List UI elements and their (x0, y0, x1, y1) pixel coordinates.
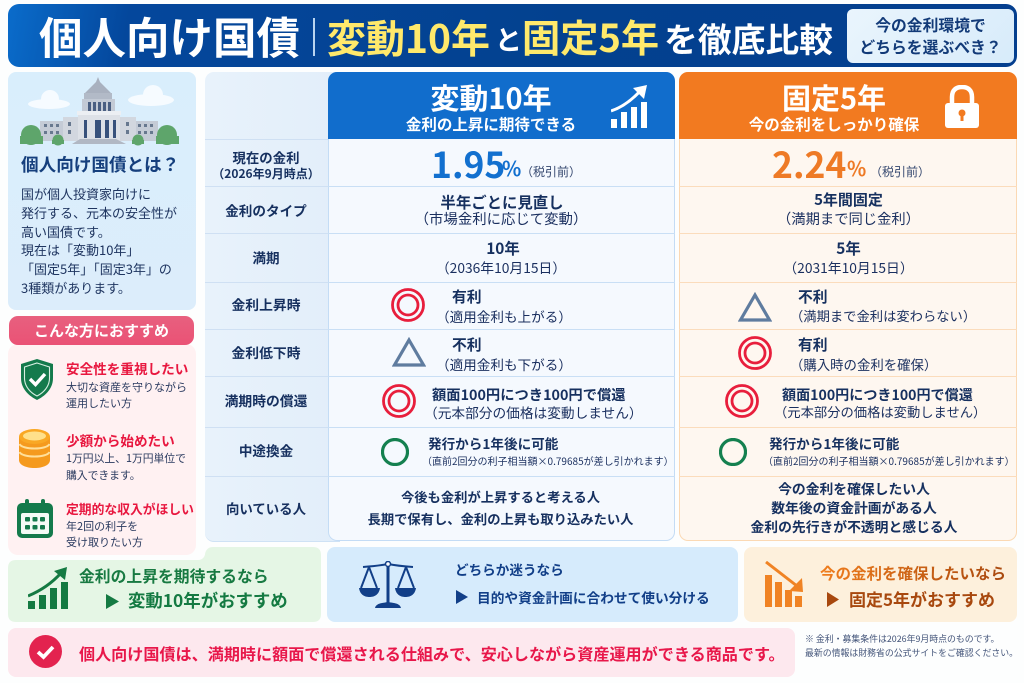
suited people (368, 487, 634, 528)
orange lead text: 今の金利を確保したいなら (820, 562, 1006, 584)
title (39, 4, 833, 67)
maturity bold: 5年 (836, 237, 861, 259)
blue lead text: どちらか迷うなら (455, 559, 564, 579)
column title: 変動10年 (430, 76, 552, 118)
icon: double circle (738, 336, 772, 370)
footnote: ※ 金利・募集条件は2026年9月時点のものです。 (805, 632, 999, 645)
about body text: 現在は「変動10年」 (21, 240, 139, 259)
icon: double circle (391, 288, 425, 322)
type bold: 半年ごとに見直し (440, 191, 564, 213)
column header (679, 72, 1017, 139)
rise text bold: 有利 (452, 286, 482, 307)
cashing bold: 発行から1年後に可能 (428, 433, 558, 453)
label: 金利低下時: 金利低下時 (232, 342, 300, 362)
rate value (431, 138, 581, 189)
green arrow (106, 594, 119, 609)
about body text: 「固定5年」「固定3年」の (21, 259, 172, 278)
label: 向いている人: 向いている人 (226, 498, 306, 518)
type note: （市場金利に応じて変動） (415, 208, 587, 229)
label: 満期時の償還: 満期時の償還 (225, 390, 307, 410)
item text: 1万円以上、1万円単位で (66, 450, 186, 466)
footnote: 最新の情報は財務省の公式サイトをご確認ください。 (805, 646, 1018, 659)
tax note: （税引前） (870, 163, 930, 180)
title: 変動10年: 変動10年 (327, 9, 490, 65)
item: safety (21, 358, 188, 411)
type bold: 5年間固定 (814, 189, 883, 210)
label: 金利上昇時: 金利上昇時 (232, 294, 300, 314)
cashing bold: 発行から1年後に可能 (769, 433, 899, 453)
icon: check circle (29, 635, 62, 668)
item text (66, 379, 187, 411)
about body text (21, 184, 177, 297)
item text: 運用したい方 (66, 395, 132, 411)
about body text: 国が個人投資家向けに (21, 184, 151, 203)
orange conclusion: 固定5年がおすすめ (849, 586, 995, 611)
icon: rising chart (611, 85, 647, 128)
row dividers (329, 186, 674, 477)
item text: 受け取りたい方 (66, 534, 143, 550)
redemption note: （元本部分の価格は変動しません） (424, 402, 643, 422)
fall text bold: 有利 (798, 334, 828, 355)
maturity bold: 10年 (486, 237, 520, 259)
icon: triangle (738, 292, 772, 322)
icon: falling chart (765, 561, 803, 607)
rise text bold: 不利 (798, 286, 828, 307)
title: を徹底比較: を徹底比較 (664, 13, 833, 62)
about body text: 高い国債です。 (21, 222, 111, 241)
panel: green recommendation (8, 547, 321, 622)
green text line: 金利の上昇を期待するなら (79, 564, 269, 587)
column title: 固定5年 (782, 76, 886, 118)
about body text: 発行する、元本の安全性が (21, 203, 177, 222)
column subtitle: 今の金利をしっかり確保 (749, 113, 919, 135)
title: 個人向け国債: 個人向け国債 (39, 4, 300, 67)
label: 満期: 満期 (252, 247, 280, 267)
icon: circle (719, 438, 747, 466)
fall note: （購入時の金利を確保） (790, 354, 937, 374)
row dividers (680, 186, 1016, 477)
column: 固定5年 (679, 72, 1017, 541)
orange arrow (827, 592, 839, 607)
redemption note: （元本部分の価格は変動しません） (774, 402, 986, 421)
redemption bold: 額面100円につき100円で償還 (432, 384, 626, 405)
item text: 購入できます。 (66, 466, 140, 482)
item text (66, 450, 186, 482)
column header (328, 72, 675, 139)
tax note: （税引前） (521, 163, 581, 180)
column: 変動10年 (328, 72, 675, 541)
rate number: 2.24 (772, 138, 846, 189)
rate number: 1.95 (431, 138, 505, 189)
rise note: （適用金利も上がる） (436, 306, 572, 326)
summary text: 個人向け国債は、満期時に額面で償還される仕組みで、安心しながら資産運用ができる商品です。 (79, 641, 785, 665)
panel: summary (8, 628, 795, 677)
icon: calendar (17, 499, 53, 538)
panel: orange recommendation (744, 547, 1017, 622)
icon: triangle (392, 337, 426, 367)
title: と: と (495, 19, 522, 58)
callout text: 今の金利環境で (875, 13, 986, 36)
comparison table (205, 72, 1017, 542)
label: 中途換金: 中途換金 (239, 440, 293, 460)
title divider (313, 18, 315, 56)
item text: 大切な資産を守りながら (66, 379, 187, 395)
rate percent: % (502, 153, 521, 182)
redemption bold: 額面100円につき100円で償還 (782, 385, 973, 405)
label: 金利のタイプ: 金利のタイプ (225, 200, 307, 220)
blue arrow (456, 590, 468, 604)
fall note: （適用金利も下がる） (436, 354, 572, 374)
item: small amount (19, 429, 186, 482)
callout: 今の金利環境で (847, 9, 1014, 63)
label: 2026年9月時点: （2026年9月時点） (212, 165, 320, 182)
callout text: どちらを選ぶべき？ (859, 35, 1002, 58)
row dividers (205, 139, 328, 477)
suited people: 長期で保有し、金利の上昇も取り込みたい人 (368, 508, 633, 528)
maturity date: （2036年10月15日） (436, 257, 566, 277)
icon: circle (381, 438, 409, 466)
suited people: 今の金利を確保したい人 (778, 478, 930, 498)
fall text bold: 不利 (452, 334, 482, 355)
recommendation heading: こんな方におすすめ (34, 320, 169, 341)
callout text (859, 13, 1002, 58)
recommendation body background (8, 344, 196, 555)
heading: 個人向け国債とは？: 個人向け国債とは？ (21, 152, 179, 177)
column subtitle: 金利の上昇に期待できる (406, 113, 576, 135)
label: 現在の金利: 現在の金利 (233, 147, 299, 167)
rate percent: % (847, 153, 866, 182)
suited people: 数年後の資金計画がある人 (771, 497, 937, 517)
illustration: national diet building (20, 77, 179, 146)
panel: blue recommendation (327, 547, 738, 622)
item: regular income (17, 499, 194, 550)
icon: double circle (382, 384, 416, 418)
panel: about (8, 72, 196, 310)
icon: coins (19, 429, 50, 468)
about body text: 3種類があります。 (21, 278, 131, 297)
icon: lock (945, 85, 979, 128)
green background (8, 547, 321, 622)
footnote (805, 632, 1020, 662)
green conclusion: 変動10年がおすすめ (128, 588, 288, 613)
item text (66, 518, 143, 550)
icon: double circle (725, 384, 759, 418)
blue conclusion: 目的や資金計画に合わせて使い分ける (477, 587, 710, 607)
type note: （満期まで同じ金利） (777, 208, 920, 229)
panel: recommended for (8, 316, 196, 555)
suited people (750, 478, 958, 536)
item heading: 定期的な収入がほしい (66, 499, 194, 518)
header banner (8, 4, 1017, 67)
cashing note: （直前2回分の利子相当額×0.79685が差し引かれます） (763, 453, 1015, 468)
recommendation heading (9, 316, 194, 345)
item heading: 少額から始めたい (66, 430, 175, 450)
icon: shield (21, 359, 53, 400)
maturity date: （2031年10月15日） (783, 257, 914, 277)
cashing note: （直前2回分の利子相当額×0.79685が差し引かれます） (422, 453, 674, 468)
rate value (772, 138, 930, 189)
suited people: 今後も金利が上昇すると考える人 (401, 487, 600, 506)
label column (205, 72, 340, 542)
item text: 年2回の利子を (66, 518, 138, 534)
icon: rising green chart (28, 567, 68, 609)
title: 固定5年: 固定5年 (522, 9, 659, 64)
suited people: 金利の先行きが不透明と感じる人 (751, 516, 957, 536)
rise note: （満期まで金利は変わらない） (790, 306, 976, 325)
item heading: 安全性を重視したい (66, 358, 188, 378)
icon: scales (359, 561, 416, 608)
